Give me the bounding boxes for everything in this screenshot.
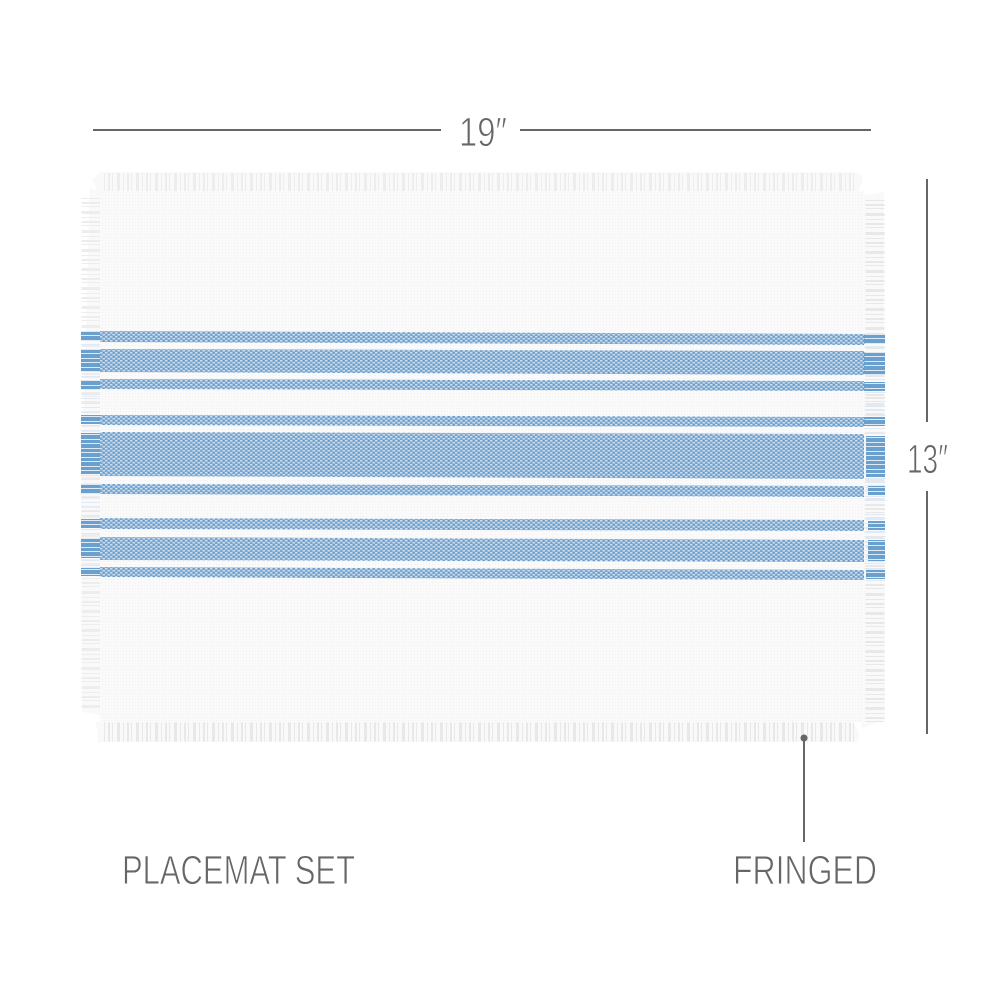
blue stripes xyxy=(100,331,864,580)
woven fabric body xyxy=(100,191,864,722)
label: placemat set: PLACEMAT SET xyxy=(122,847,355,893)
height dimension: 13 inches: 13″ xyxy=(907,436,948,482)
callout: fringed xyxy=(733,734,877,893)
placemat xyxy=(81,172,885,742)
fringe: top, bottom, left and right edges xyxy=(81,172,885,742)
blue stripe fringe: left xyxy=(81,331,100,576)
width dimension: 19 inches: 19″ xyxy=(459,109,507,155)
blue stripe fringe: right xyxy=(864,334,885,579)
callout: fringed: FRINGED xyxy=(733,847,877,893)
